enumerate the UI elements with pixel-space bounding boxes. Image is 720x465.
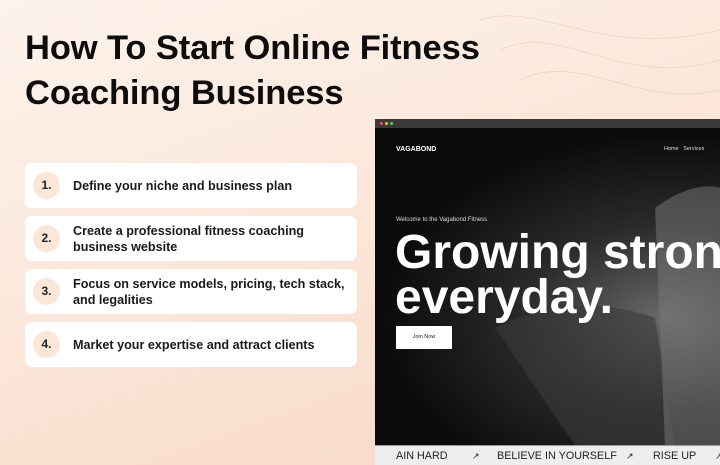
step 3: 3. <box>41 284 52 298</box>
step 3: and legalities <box>73 292 153 306</box>
step 2: Create a professional fitness coaching <box>73 224 304 238</box>
ticker strip: RISE UP <box>653 450 696 462</box>
step 3 <box>25 269 357 314</box>
browser bar <box>375 119 720 128</box>
title: How To Start Online Fitness <box>25 29 480 67</box>
step 2: business website <box>73 240 177 254</box>
title: Coaching Business <box>25 74 343 112</box>
step 4 <box>25 322 357 367</box>
step 2: 2. <box>41 231 52 245</box>
ticker strip: AIN HARD <box>396 450 448 462</box>
hero photo shading <box>375 128 720 445</box>
step 3: Focus on service models, pricing, tech stack, <box>73 276 345 290</box>
title <box>25 29 480 112</box>
step list <box>25 163 357 367</box>
step 1: Define your niche and business plan <box>73 178 292 192</box>
ticker strip <box>375 445 720 465</box>
ticker strip: ↗ <box>626 451 634 461</box>
ticker strip: BELIEVE IN YOURSELF <box>497 450 617 462</box>
hero text: Welcome to the Vagabond Fitness <box>396 217 487 223</box>
website mockup: Home Services <box>664 146 704 152</box>
step 1: 1. <box>41 178 52 192</box>
nav: VAGABOND <box>396 146 436 153</box>
step 4: 4. <box>41 337 52 351</box>
ticker strip: ↗ <box>472 451 480 461</box>
hero photo figure <box>495 186 720 445</box>
step 1 <box>25 163 357 208</box>
website mockup: everyday. <box>395 271 613 324</box>
step 2 <box>25 216 357 261</box>
join button <box>396 326 452 349</box>
website mockup <box>375 119 720 465</box>
step 4: Market your expertise and attract clients <box>73 338 314 352</box>
join button: Join Now <box>413 334 435 340</box>
